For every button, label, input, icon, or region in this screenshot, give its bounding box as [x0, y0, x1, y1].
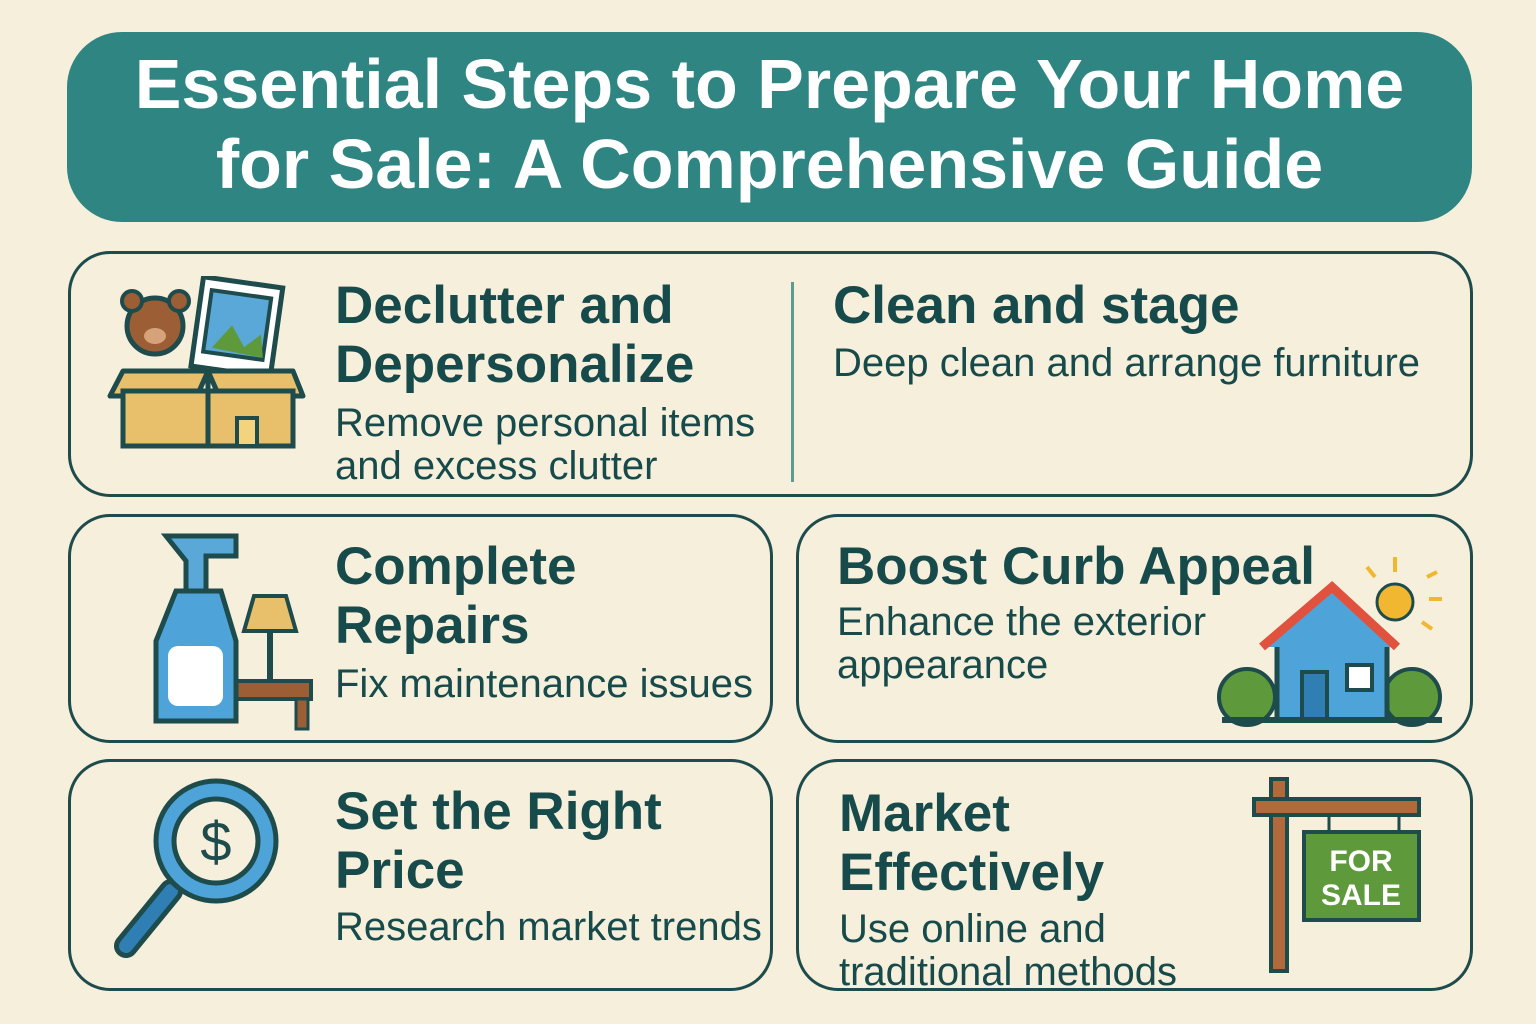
icon: magnifier with dollar	[114, 778, 278, 958]
heading: curb appeal: Boost Curb Appeal	[837, 537, 1315, 596]
title banner: for Sale: A Comprehensive Guide	[216, 125, 1323, 203]
icon: house with sun	[1217, 557, 1442, 727]
heading: price	[335, 782, 662, 900]
icon: for sale sign: FOR	[1329, 845, 1393, 878]
text: declutter	[335, 401, 755, 488]
icon: box with teddy and frame	[108, 276, 306, 448]
text: declutter: and excess clutter	[335, 444, 657, 488]
text: price: Research market trends	[335, 905, 762, 949]
text: market: traditional methods	[839, 950, 1177, 994]
title banner: Essential Steps to Prepare Your Home	[135, 45, 1404, 123]
heading: repairs	[335, 537, 576, 655]
divider	[791, 282, 794, 482]
heading: price: Set the Right	[335, 782, 662, 841]
heading: market	[839, 784, 1104, 902]
text: repairs: Fix maintenance issues	[335, 662, 753, 706]
heading: repairs: Repairs	[335, 596, 529, 655]
title banner	[67, 32, 1472, 222]
text: market: Use online and	[839, 907, 1106, 951]
icon: for sale sign: SALE	[1321, 879, 1401, 912]
text: curb: Enhance the exterior	[837, 600, 1206, 644]
heading: clean and stage: Clean and stage	[833, 276, 1239, 335]
panel: declutter and clean	[68, 251, 1473, 497]
panel: market effectively	[796, 759, 1473, 991]
icon: magnifier with dollar: $	[200, 810, 232, 873]
text: curb: appearance	[837, 643, 1048, 687]
heading: declutter: Depersonalize	[335, 335, 694, 394]
heading: market: Effectively	[839, 843, 1104, 902]
heading: declutter: Declutter and	[335, 276, 674, 335]
text: curb	[837, 600, 1206, 687]
text: clean: Deep clean and arrange furniture	[833, 341, 1420, 385]
heading: market: Market	[839, 784, 1010, 843]
icon: spray bottle and lamp	[154, 534, 313, 730]
heading: repairs: Complete	[335, 537, 576, 596]
heading: declutter	[335, 276, 694, 394]
panel: curb appeal	[796, 514, 1473, 743]
text: declutter: Remove personal items	[335, 401, 755, 445]
panel: set the right price	[68, 759, 773, 991]
icon: for sale sign	[1252, 777, 1421, 973]
heading: price: Price	[335, 841, 465, 900]
text: market	[839, 907, 1177, 994]
panel: complete repairs	[68, 514, 773, 743]
